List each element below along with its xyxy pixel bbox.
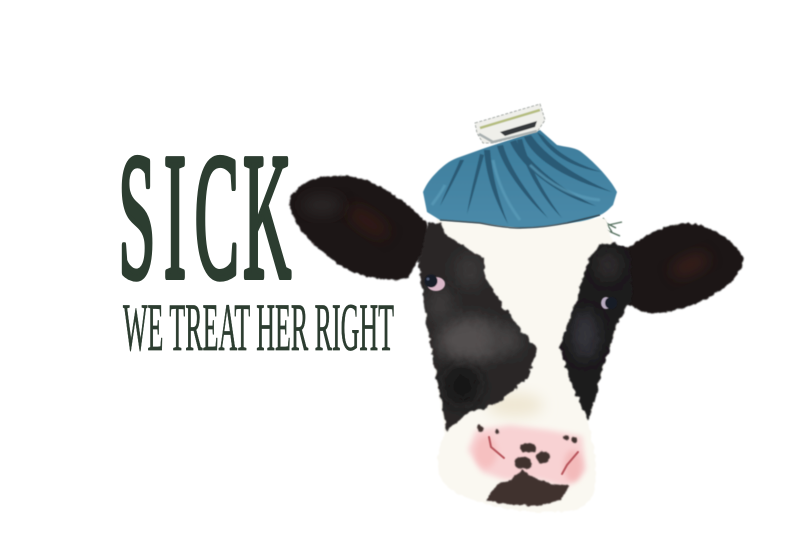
face — [425, 218, 628, 512]
bag bottom edge — [440, 215, 600, 228]
ice bag — [423, 130, 617, 228]
title: SICK: I — [164, 118, 186, 317]
left ear — [289, 176, 432, 280]
left eye — [424, 274, 445, 291]
bag body — [423, 130, 617, 228]
title: SICK: K — [243, 118, 291, 317]
title: SICK: C — [195, 118, 239, 317]
right eye — [601, 297, 617, 309]
cow head illustration — [289, 104, 743, 512]
title: SICK — [118, 118, 291, 317]
right ear — [618, 223, 743, 313]
left black patch — [418, 222, 537, 431]
pink nose — [468, 425, 586, 488]
bag highlights — [432, 160, 600, 220]
nose spots — [477, 425, 577, 506]
forehead and muzzle shading — [487, 393, 543, 417]
eyelashes — [603, 218, 622, 236]
ice bag cap — [475, 104, 545, 143]
nostrils — [489, 437, 578, 474]
right black patch — [560, 243, 632, 421]
bag folds — [440, 132, 612, 224]
title: SICK: S — [118, 118, 155, 317]
